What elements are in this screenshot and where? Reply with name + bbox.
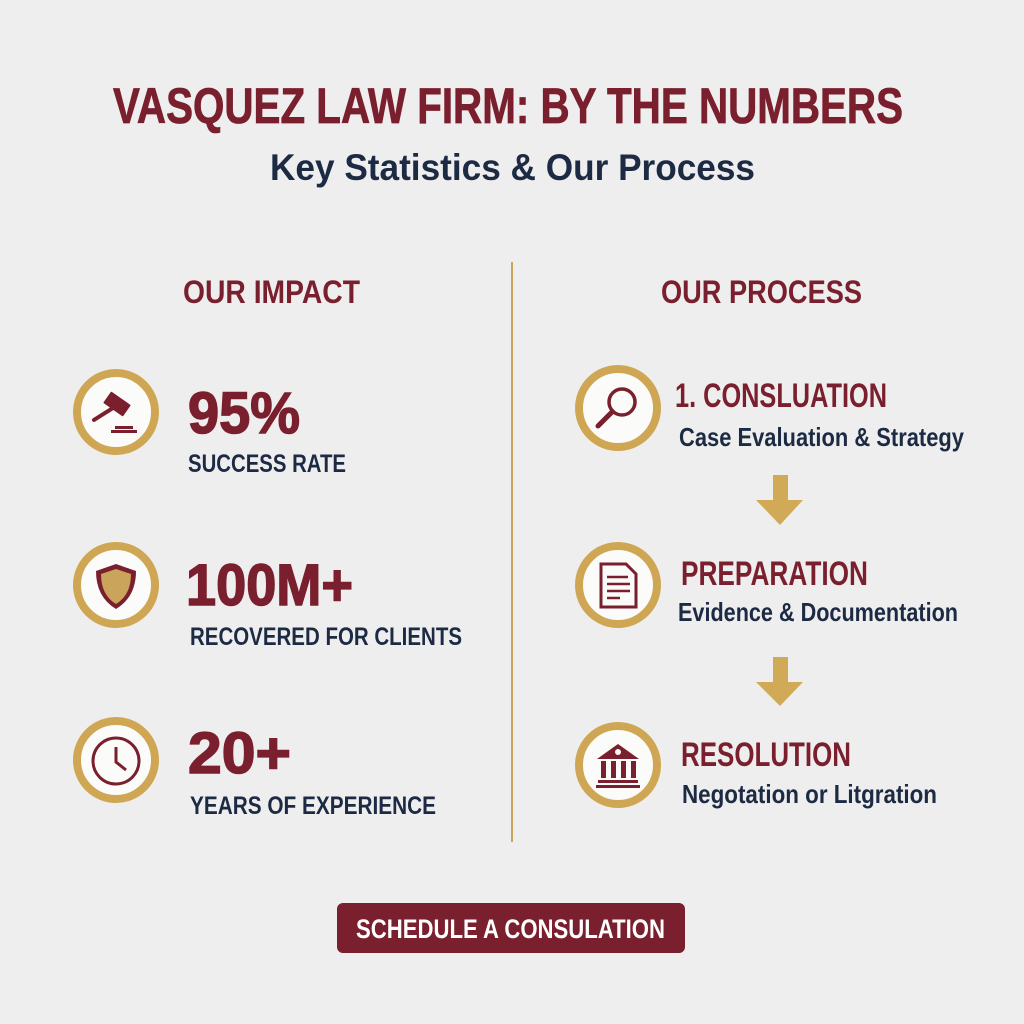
button: schedule: SCHEDULE A CONSULATION <box>356 914 665 944</box>
icon: clock <box>77 721 155 799</box>
icon: document <box>579 546 657 624</box>
icon: shield <box>77 546 155 624</box>
arrow 2 <box>756 657 803 706</box>
icon: gavel <box>77 373 155 451</box>
stat: 100M+: 100M+ <box>186 553 353 618</box>
panel: impact <box>77 373 462 820</box>
label: success rate: SUCCESS RATE <box>188 450 346 478</box>
step 2 title: PREPARATION <box>681 555 868 593</box>
panel: process <box>579 369 964 809</box>
step 2 desc: Evidence & Documentation <box>678 597 958 627</box>
step 3 title: RESOLUTION <box>681 736 851 774</box>
stat: 95%: 95% <box>188 381 300 446</box>
step 1 desc: Case Evaluation & Strategy <box>679 422 964 452</box>
icon: magnifier <box>579 369 657 447</box>
step 1 title: 1. CONSLUATION <box>675 377 887 415</box>
heading: our impact: OUR IMPACT <box>183 274 360 310</box>
stat: 20+: 20+ <box>188 721 291 786</box>
label: recovered: RECOVERED FOR CLIENTS <box>190 623 462 651</box>
arrow 1 <box>756 475 803 525</box>
button: schedule <box>337 903 685 953</box>
heading: our process: OUR PROCESS <box>661 274 862 310</box>
subtitle: Key Statistics & Our Process <box>270 147 755 188</box>
step 3 desc: Negotation or Litgration <box>682 779 937 809</box>
icon: courthouse <box>579 726 657 804</box>
label: years: YEARS OF EXPERIENCE <box>190 792 436 820</box>
